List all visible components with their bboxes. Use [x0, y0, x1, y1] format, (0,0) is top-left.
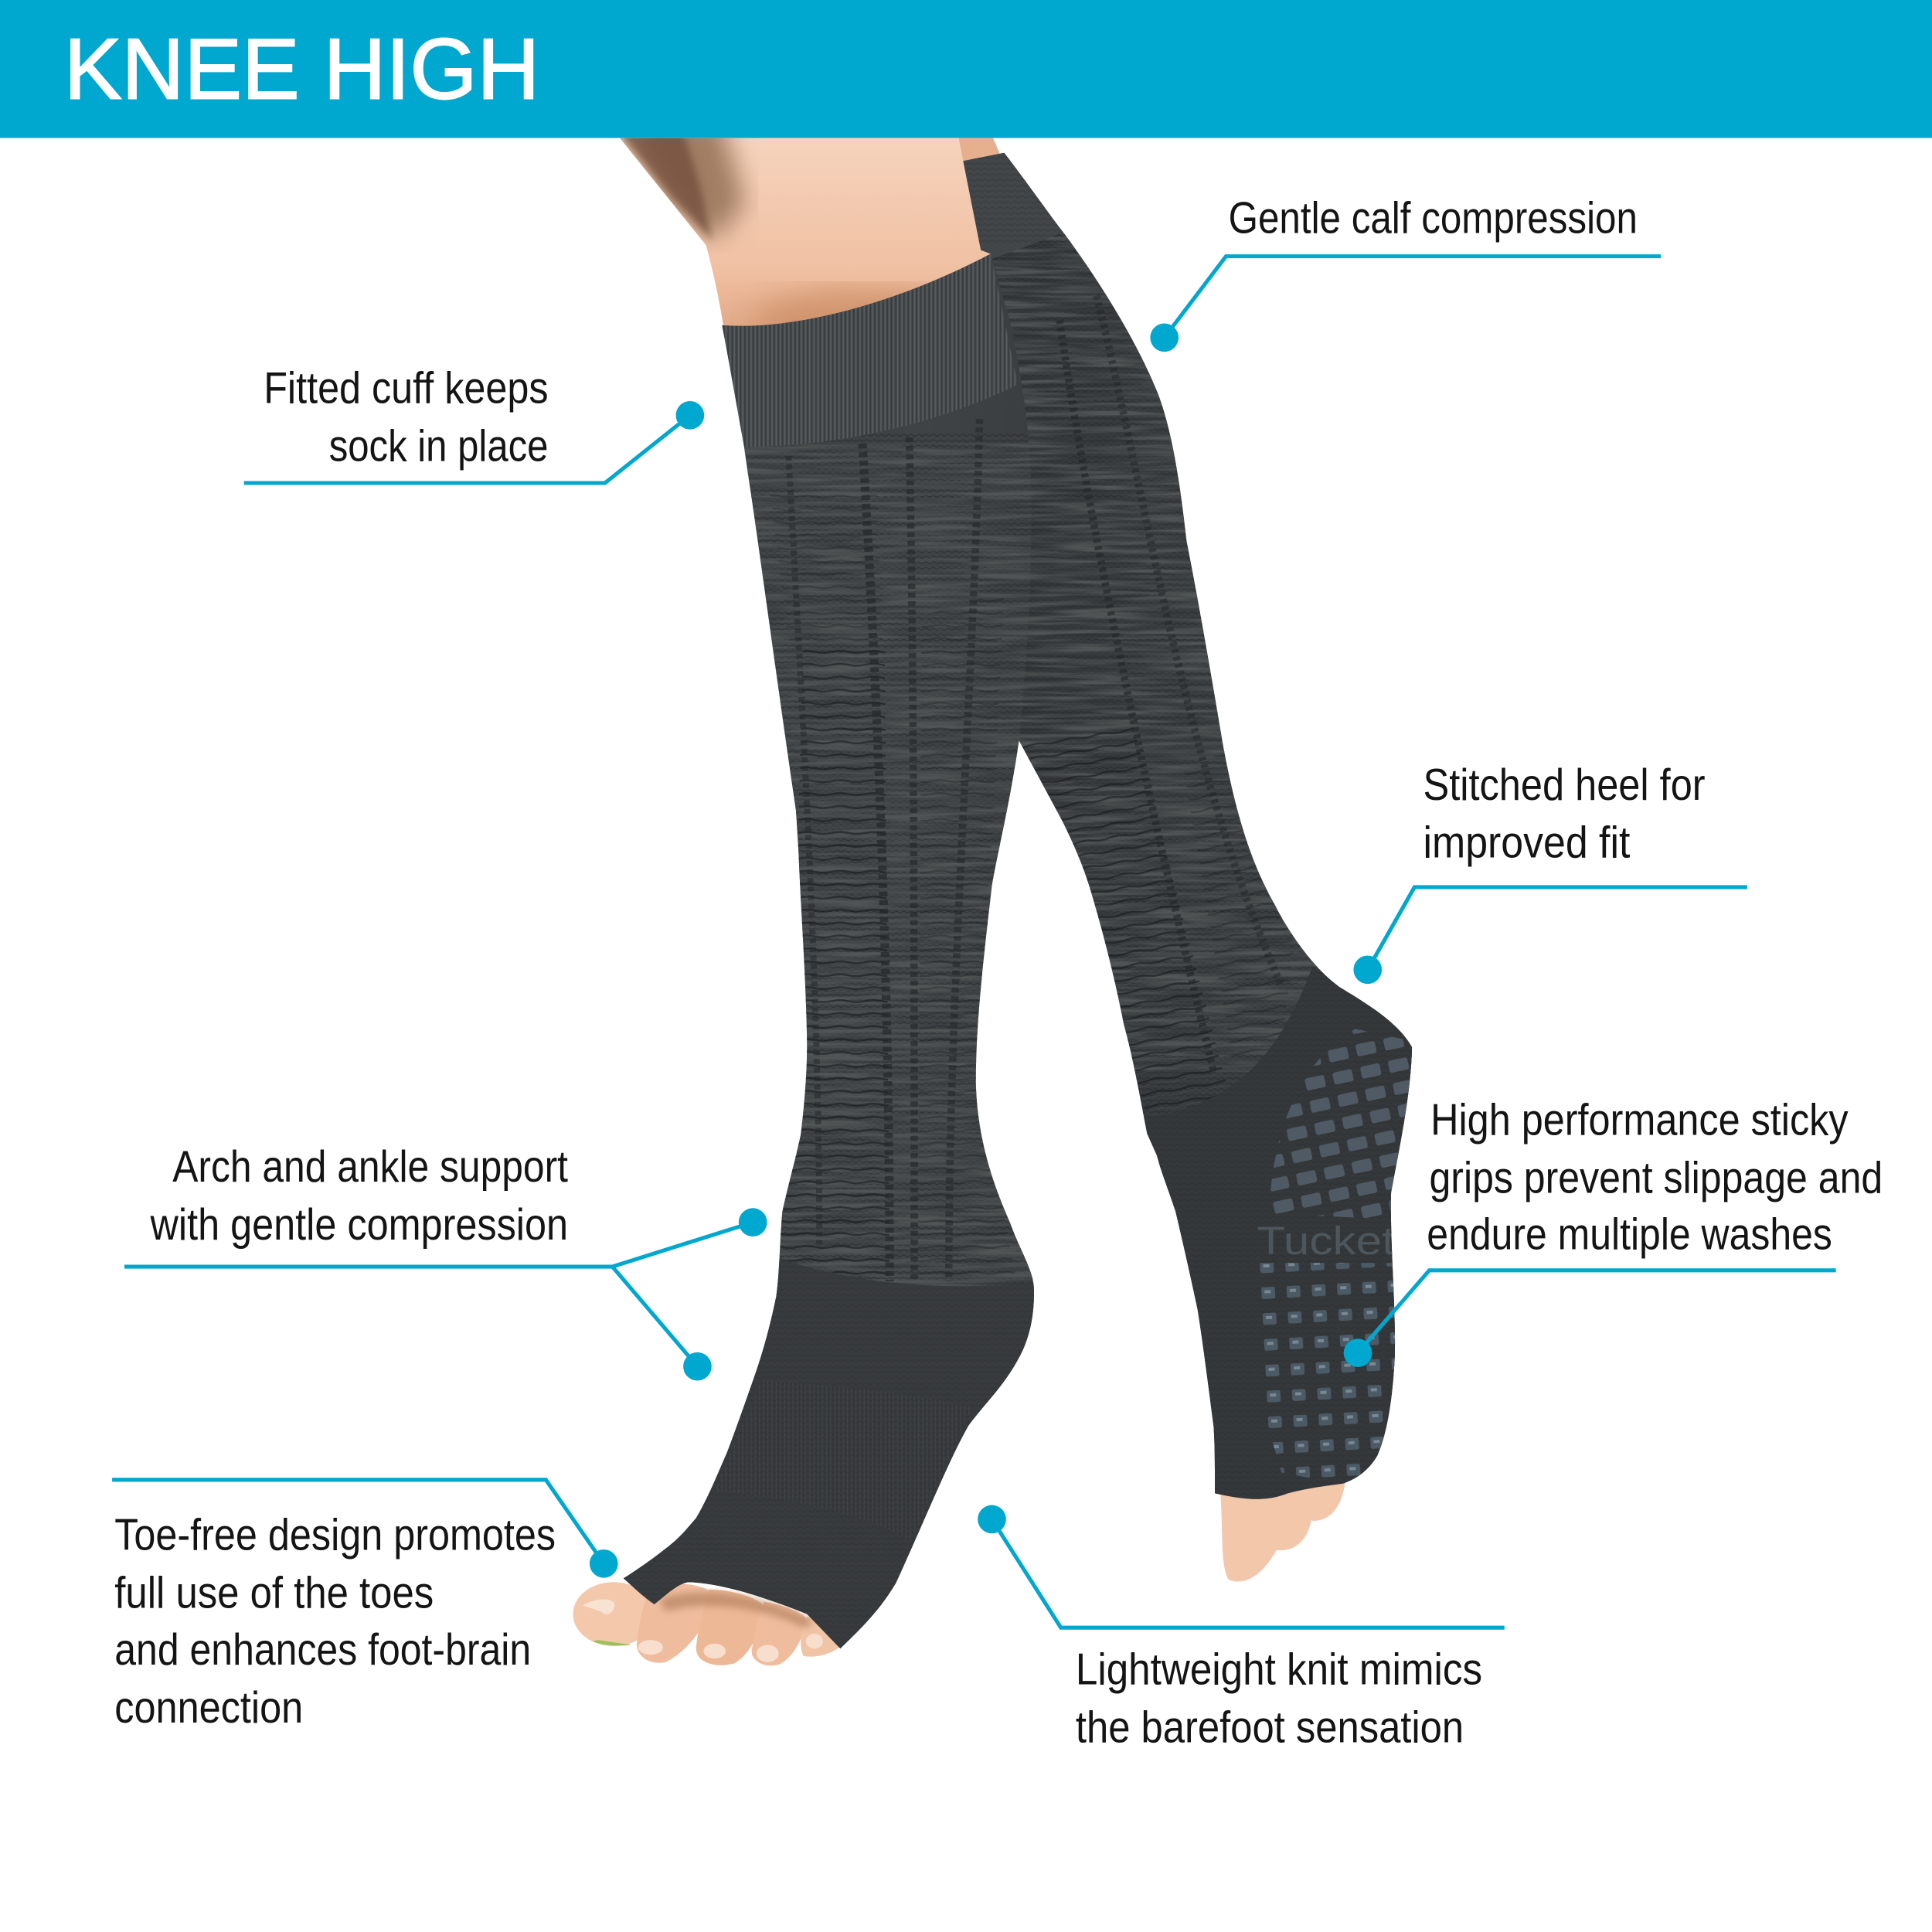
callout: sticky grips: endure multiple washes	[1427, 1210, 1832, 1260]
callout: lightweight knit: the barefoot sensation	[1076, 1702, 1464, 1752]
front foot toes	[573, 1582, 840, 1665]
callout: fitted cuff: Fitted cuff keeps	[264, 363, 549, 413]
back sock ruching	[1021, 727, 1226, 1113]
grip logo text: Tucket	[1257, 1219, 1395, 1263]
callout: toe-free design: connection	[114, 1683, 303, 1733]
callout: stitched heel	[1353, 760, 1747, 984]
pebbled vertical columns	[862, 444, 889, 1281]
callout: fitted cuff: sock in place	[329, 421, 549, 471]
callout: toe-free design: Toe-free design promotes	[114, 1511, 556, 1560]
callout: lightweight knit	[978, 1505, 1505, 1752]
callout: toe-free design: and enhances foot-brain	[114, 1625, 531, 1675]
callout: lightweight knit: Lightweight knit mimics	[1076, 1645, 1482, 1695]
back sock	[949, 138, 1429, 1518]
back foot grips	[1250, 1029, 1412, 1485]
header banner	[0, 0, 1932, 138]
callout: sticky grips	[1344, 1095, 1883, 1367]
product photo: legs in knee-high socks	[573, 117, 1429, 1665]
callout: arch and ankle support: Arch and ankle support	[172, 1142, 568, 1192]
front sock ruching	[770, 641, 889, 1281]
front leg skin	[620, 138, 991, 326]
cuff	[722, 253, 1018, 447]
callout: toe-free design: full use of the toes	[114, 1569, 434, 1618]
title: KNEE HIGH	[64, 21, 539, 117]
toenails	[583, 1599, 615, 1614]
foot panel	[623, 1258, 1034, 1649]
back leg skin	[958, 138, 1001, 165]
callout: gentle calf compression	[1150, 193, 1661, 352]
toe shading under the sock edge	[659, 1592, 813, 1629]
callout: sticky grips: High performance sticky	[1430, 1095, 1849, 1145]
front sock	[623, 253, 1034, 1649]
knee shadow	[616, 117, 746, 240]
callout: gentle calf compression: Gentle calf compression	[1229, 193, 1638, 243]
ribbed arch band	[715, 1380, 972, 1540]
callout: arch and ankle support: with gentle compression	[150, 1200, 568, 1250]
callout: toe-free design	[112, 1480, 618, 1733]
callout: fitted cuff	[244, 363, 704, 483]
callout: stitched heel: Stitched heel for	[1423, 760, 1706, 810]
callout: arch and ankle support	[124, 1142, 767, 1381]
back foot toes	[1219, 1478, 1345, 1581]
callout: stitched heel: improved fit	[1423, 818, 1630, 868]
